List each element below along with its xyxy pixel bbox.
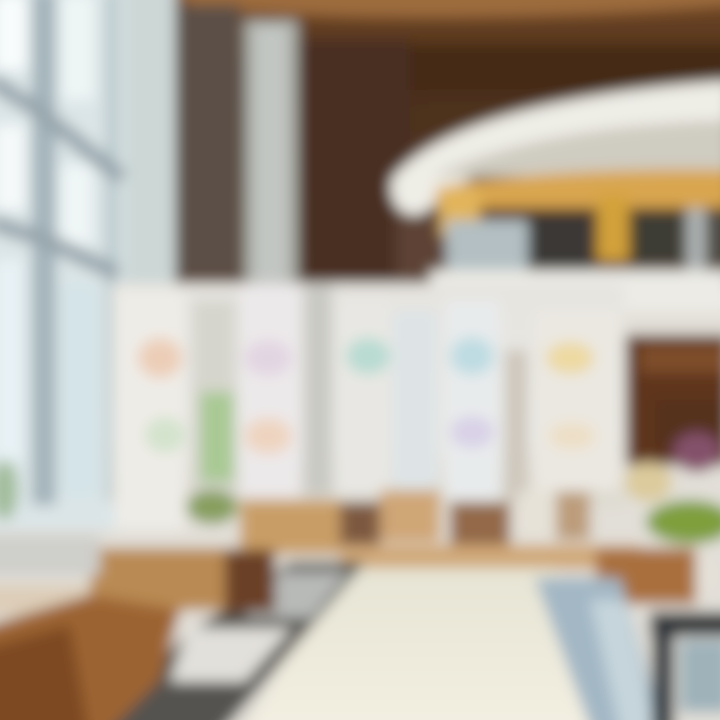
flower arrangement — [624, 432, 720, 600]
dark table at lower right — [650, 612, 720, 720]
plant — [0, 392, 238, 524]
dark columns — [172, 5, 452, 280]
wood tables at left — [0, 535, 275, 720]
white balcony band — [430, 270, 720, 312]
dark interior at right — [626, 335, 720, 465]
upper floor windows — [446, 208, 720, 280]
counter and wood seating — [240, 490, 696, 604]
rotunda ceiling ring — [391, 80, 720, 215]
display panels — [112, 283, 624, 530]
floor — [240, 568, 600, 720]
ceiling and back wall — [170, 0, 720, 290]
blue glass at lower right — [535, 578, 665, 720]
light column — [244, 20, 298, 288]
pastel accents on panels — [138, 337, 596, 454]
window mullions — [0, 0, 122, 505]
yellow band under ring — [436, 170, 720, 261]
window wall — [0, 0, 175, 530]
dark floor runner — [90, 562, 365, 720]
